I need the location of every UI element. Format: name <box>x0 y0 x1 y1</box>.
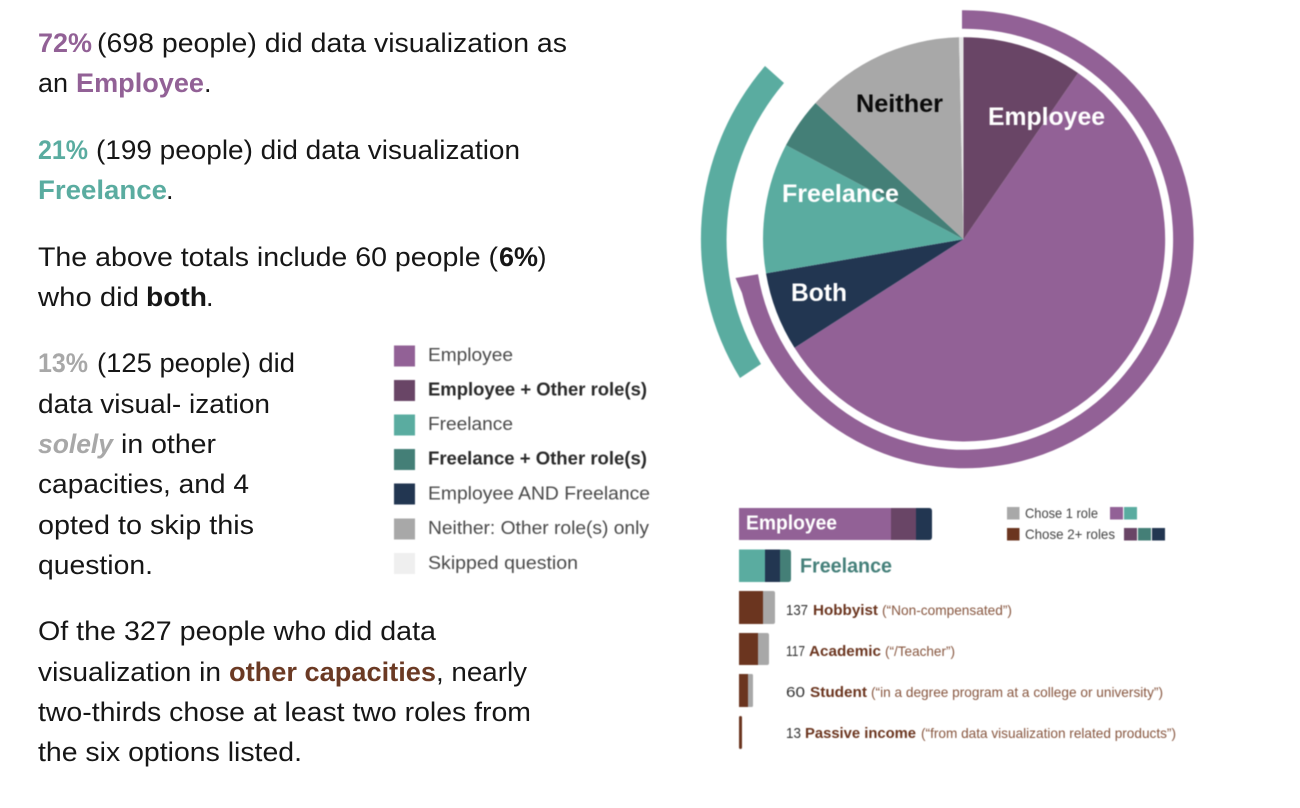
text block: other capacities: Of the 327 people who did data <box>38 616 437 646</box>
key: chose one or more roles <box>1007 505 1165 542</box>
key row: chose 2 or more roles <box>1007 526 1165 542</box>
text block: employee share <box>38 28 567 98</box>
text block: freelance share: (199 people) did data visualization <box>96 135 520 165</box>
bar: passive income: Passive income <box>805 725 916 742</box>
label: employee: Employee <box>988 103 1105 131</box>
bar: student: (“in a degree program at a college or university”) <box>871 684 1163 700</box>
slice: neither <box>816 37 964 239</box>
text block: neither role: (125 people) did <box>97 348 295 378</box>
bar: employee <box>739 508 932 540</box>
bar: academic: 117 <box>786 643 805 660</box>
bar: student: Student <box>810 684 867 701</box>
bar: passive income: 13 <box>786 725 801 742</box>
text block: neither role: opted to skip this <box>38 510 254 540</box>
legend item: freelance: Freelance <box>428 413 513 434</box>
bar: passive income <box>739 716 1176 749</box>
text block: other capacities <box>38 616 531 767</box>
text block: employee share: Employee <box>76 68 204 98</box>
text block: neither role: solely <box>38 429 115 459</box>
text block: both roles: both <box>146 282 207 312</box>
text block: other capacities: other capacities <box>229 657 436 687</box>
text block: other capacities: visualization in <box>38 657 221 687</box>
bar: hobbyist: Hobbyist <box>813 602 878 619</box>
text block: employee share: 72% <box>38 28 92 58</box>
ring: employee total <box>736 10 1194 468</box>
text block: employee share: . <box>204 68 212 98</box>
bar: employee: Employee <box>746 512 837 534</box>
legend item: employee plus other: Employee + Other role(s) <box>428 378 647 400</box>
text block: other capacities: two-thirds chose at least two roles from <box>38 697 531 727</box>
legend item: employee: Employee <box>428 344 513 365</box>
slice: employee plus other <box>964 37 1078 239</box>
bar: hobbyist <box>739 591 1012 624</box>
stacked bars: roles <box>739 508 1176 749</box>
text block: both roles: . <box>206 282 214 312</box>
bar: passive income: (“from data visualization related products”) <box>921 725 1176 741</box>
text block: neither role: in other <box>121 429 216 459</box>
text block: neither role: capacities, and 4 <box>38 469 249 499</box>
slice: employee only <box>794 73 1165 441</box>
legend item: freelance plus other: Freelance + Other role(s) <box>428 448 647 468</box>
bar: freelance <box>739 550 892 582</box>
legend item: employee <box>394 344 513 366</box>
bar: hobbyist: 137 <box>786 602 808 619</box>
legend item: neither: Neither: Other role(s) only <box>428 517 650 538</box>
key row: chose 1 role: Chose 1 role <box>1025 505 1098 521</box>
text block: freelance share: . <box>166 175 174 205</box>
text block: other capacities: the six options listed. <box>38 737 302 767</box>
text block: neither role: data visual- ization <box>38 389 270 419</box>
legend item: freelance <box>394 413 513 436</box>
pie chart with outer rings <box>701 10 1194 468</box>
slice: both <box>766 239 964 348</box>
text block: both roles: ) <box>538 242 546 272</box>
text block: both roles: The above totals include 60 people ( <box>38 242 498 272</box>
bar: freelance: Freelance <box>800 556 892 578</box>
key row: chose 1 role <box>1007 505 1137 521</box>
text block: both roles <box>37 242 547 312</box>
bar: academic: (“/Teacher”) <box>885 643 955 659</box>
text block: both roles: who did <box>37 282 139 312</box>
key row: chose 2 or more roles: Chose 2+ roles <box>1025 526 1115 542</box>
label: neither: Neither <box>856 90 943 118</box>
bar: academic: Academic <box>809 643 881 660</box>
legend item: skipped: Skipped question <box>428 552 578 573</box>
ring: freelance total <box>701 66 784 378</box>
bar: academic <box>739 633 955 665</box>
text block: freelance share: 21% <box>38 135 88 165</box>
text block: neither role: question. <box>38 550 153 580</box>
legend item: employee and freelance: Employee AND Freelance <box>428 482 650 504</box>
bar: hobbyist: (“Non-compensated”) <box>882 602 1012 618</box>
label: freelance: Freelance <box>782 180 899 208</box>
slice: freelance only <box>763 145 964 273</box>
slice: freelance plus other <box>786 103 964 239</box>
text block: both roles: 6% <box>499 242 538 272</box>
slice: skipped <box>959 37 964 239</box>
bar: student: 60 <box>786 684 805 701</box>
text block: neither role <box>38 348 295 580</box>
text block: employee share: (698 people) did data visualization as <box>97 28 567 58</box>
text block: other capacities: , nearly <box>436 657 528 687</box>
legend: pie colours <box>394 344 650 574</box>
text block: employee share: an <box>38 68 68 98</box>
text block: neither role: 13% <box>38 348 88 378</box>
text block: freelance share <box>38 135 520 205</box>
label: both: Both <box>791 279 847 307</box>
bar: student <box>739 674 1163 707</box>
text block: freelance share: Freelance <box>38 175 167 205</box>
